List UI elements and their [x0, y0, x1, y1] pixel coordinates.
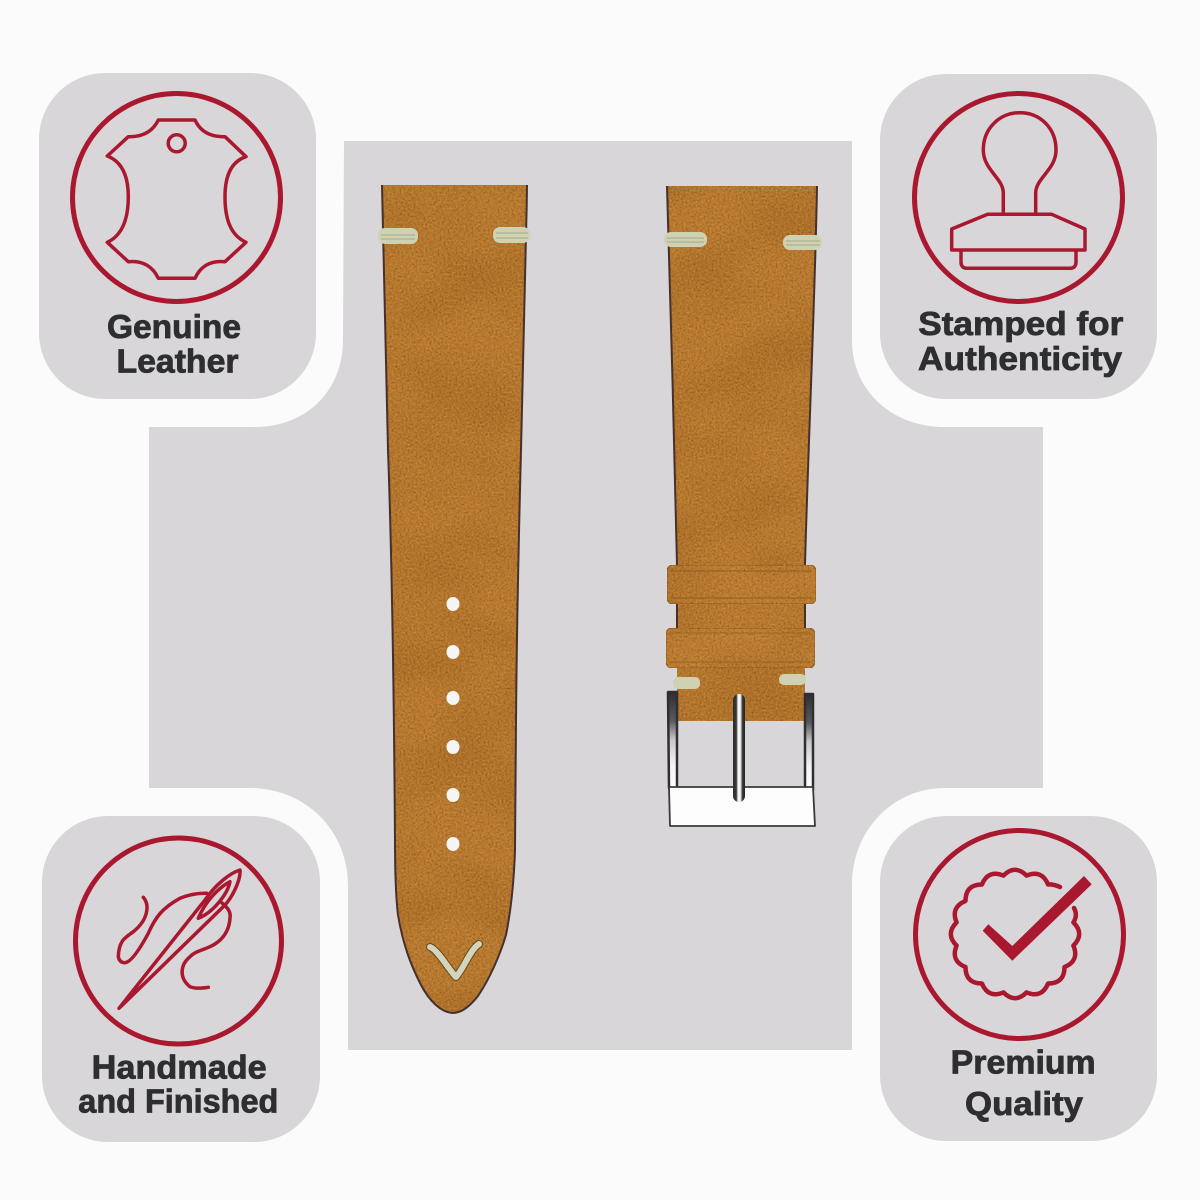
stitch: top right [493, 227, 530, 243]
label: Handmade [92, 1048, 267, 1085]
buckle frame right bar [805, 694, 813, 790]
keeper loop: upper [667, 565, 816, 604]
stitch: buckle end right [779, 674, 806, 685]
product: right watch strap with buckle [664, 186, 822, 826]
stitch: top left [378, 228, 418, 244]
label: Stamped for [918, 305, 1123, 342]
label: Quality [965, 1085, 1084, 1122]
label: Authenticity [918, 340, 1123, 377]
product: left watch strap [378, 185, 530, 1013]
stitch: V at tip [430, 944, 479, 977]
label: and Finished [78, 1083, 278, 1120]
card: Handmade and Finished [42, 816, 320, 1142]
background panel: grey cross shape [149, 141, 1043, 1050]
stitch: top left [664, 232, 707, 247]
card: Premium Quality [880, 816, 1157, 1141]
icon: needle and thread in circle [76, 838, 282, 1044]
strap edge shading [382, 185, 527, 1013]
card: Genuine Leather [39, 73, 316, 399]
metal buckle [668, 692, 815, 826]
strap holes [446, 597, 460, 851]
card: Stamped for Authenticity [880, 74, 1157, 399]
stitch: buckle end left [673, 677, 700, 689]
label: Leather [116, 343, 239, 380]
buckle pin [733, 694, 745, 802]
label: Genuine [107, 308, 241, 345]
stitch: top right [783, 235, 822, 250]
keeper loop: lower [666, 628, 815, 668]
buckle frame bottom bar [669, 787, 815, 826]
label: Premium [951, 1043, 1096, 1080]
buckle frame left bar [668, 692, 677, 788]
icon: wavy seal with check mark in circle [916, 830, 1124, 1038]
icon: rubber stamp in circle [914, 94, 1122, 302]
strap edge shading [667, 186, 817, 640]
icon: leather hide in circle [72, 94, 280, 302]
